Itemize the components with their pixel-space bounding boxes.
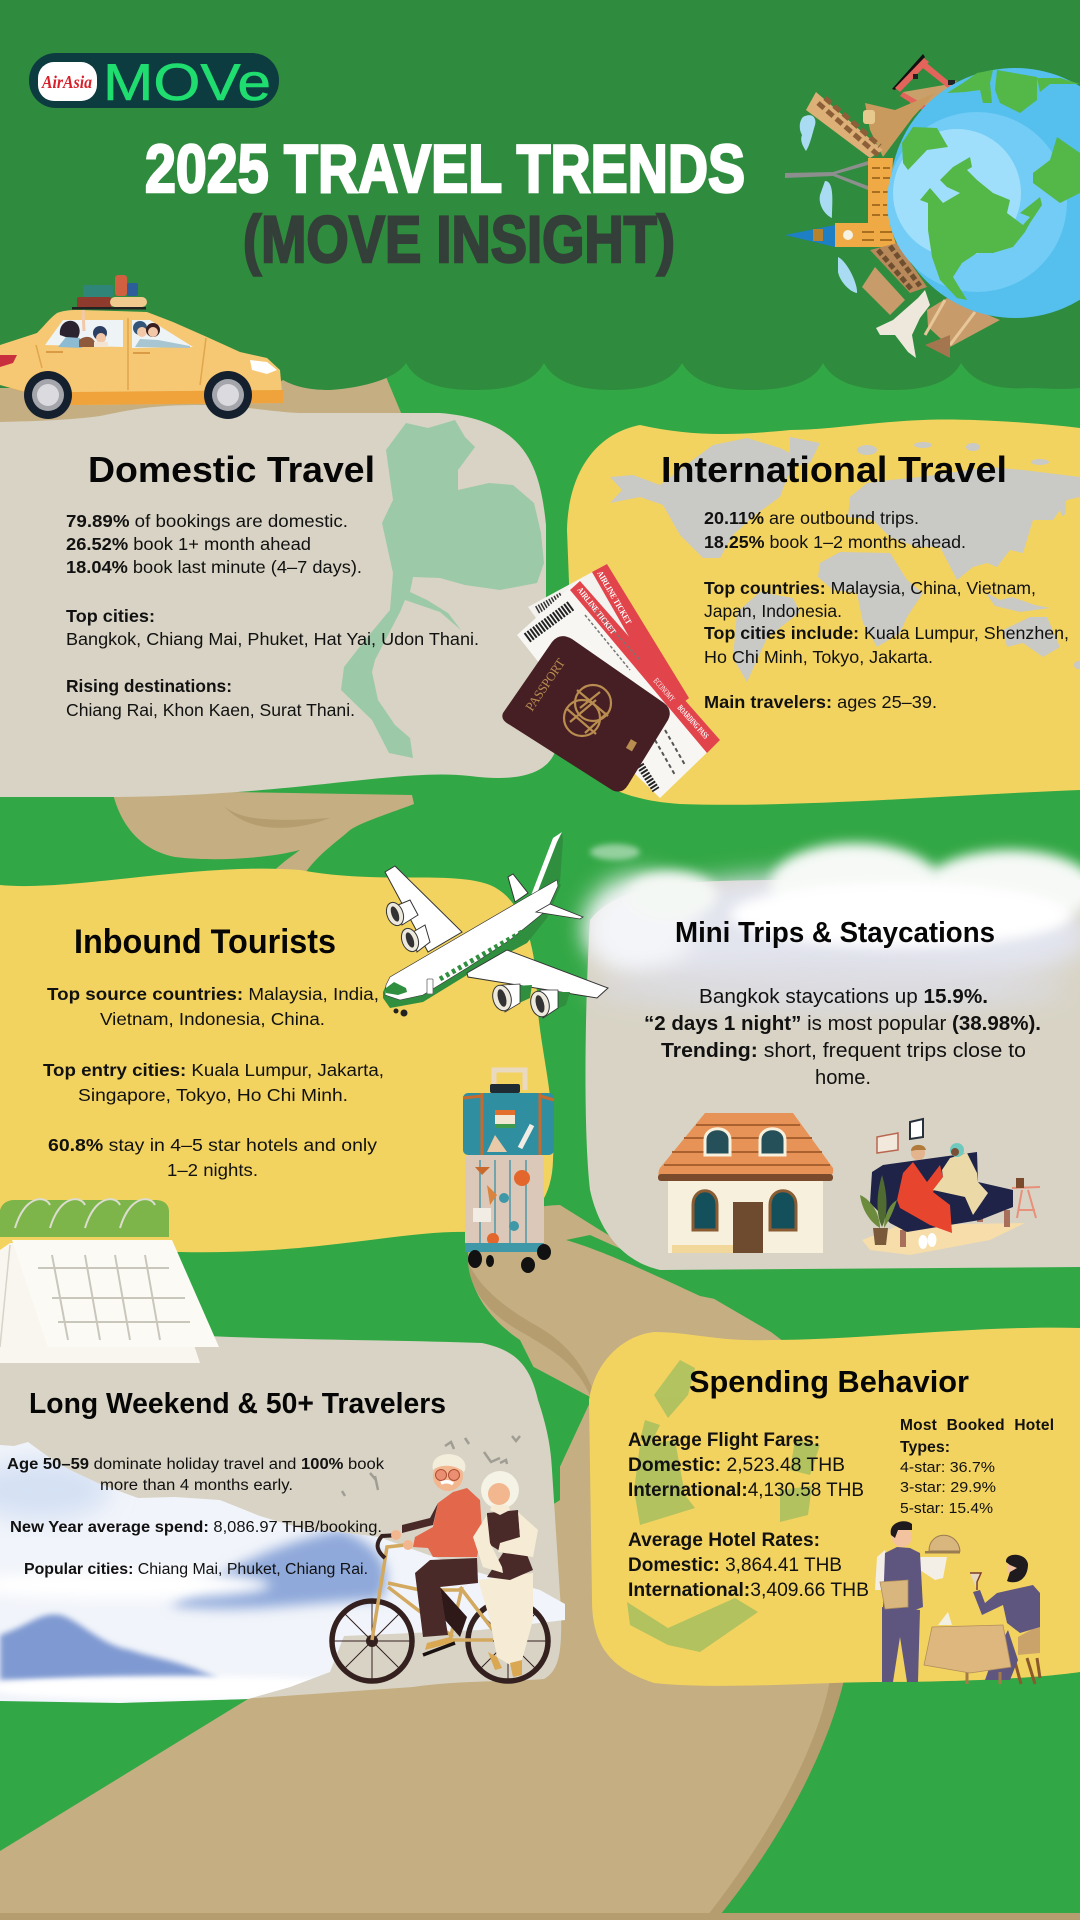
text: long weekend: New Year average spend: 8,086.97 THB/booking. <box>10 1519 382 1536</box>
text: spending behavior: International:4,130.58 THB <box>628 1480 864 1501</box>
text: international travel: 20.11% are outbound trips. <box>704 508 919 528</box>
cockpit band <box>386 982 407 995</box>
woman head <box>950 1143 964 1157</box>
text: long weekend <box>7 1388 446 1578</box>
mist and mountains <box>0 1460 110 1520</box>
woman shoes <box>488 1652 522 1677</box>
main road <box>0 1205 1080 1920</box>
text: mini trips: Bangkok staycations up 15.9%. <box>699 986 988 1008</box>
front page <box>12 1240 219 1347</box>
hub <box>366 1635 378 1647</box>
text: spending behavior <box>628 1364 1054 1601</box>
text: spending behavior: 5-star: 15.4% <box>900 1500 993 1517</box>
text: inbound tourists: Top source countries: Malaysia, India, <box>47 984 379 1004</box>
person in red blanket <box>897 1162 952 1233</box>
illustration: waiter <box>875 1521 960 1682</box>
back pages <box>0 1243 200 1363</box>
roof tile lines <box>664 1125 830 1165</box>
wine glass <box>970 1573 981 1590</box>
text: mini trips: Trending: short, frequent trips close to <box>661 1040 1026 1062</box>
text: international travel: Main travelers: ages 25–39. <box>704 692 937 712</box>
landing gear <box>394 1008 408 1016</box>
text: inbound tourists: Top entry cities: Kuala Lumpur, Jakarta, <box>43 1060 384 1080</box>
landmark: torii gate <box>892 54 958 112</box>
diner head <box>1006 1555 1028 1582</box>
green header <box>0 1200 169 1237</box>
text: inbound tourists: Inbound Tourists <box>74 923 336 961</box>
icon: calendar <box>0 1199 219 1363</box>
map: Thailand <box>341 420 544 758</box>
passport <box>502 636 670 792</box>
winding road segment <box>112 790 414 885</box>
passport emblem <box>564 685 611 736</box>
text: domestic travel: Rising destinations: <box>66 676 232 696</box>
table <box>924 1625 1011 1673</box>
man torso <box>413 1488 482 1557</box>
icon: money bills <box>627 1360 820 1652</box>
illustration: birds <box>342 1436 520 1496</box>
woman head <box>481 1471 519 1515</box>
waiter head <box>891 1521 912 1547</box>
landmark: white statue <box>876 290 930 358</box>
text: domestic travel: 79.89% of bookings are domestic. <box>66 511 348 531</box>
watercolor landscape <box>0 1440 570 1705</box>
back ticket <box>528 564 689 760</box>
text: spending behavior: 4-star: 36.7% <box>900 1459 995 1476</box>
text: domestic travel: 18.04% book last minute (4–7 days). <box>66 557 362 577</box>
door <box>427 979 433 994</box>
text: spending behavior: International:3,409.66 THB <box>628 1580 869 1601</box>
door <box>733 1202 763 1253</box>
ground <box>672 1245 733 1253</box>
fuselage white top <box>385 880 558 1000</box>
windows <box>45 320 193 348</box>
text: spending behavior: Types: <box>900 1439 950 1456</box>
dark green sky with scalloped edge <box>0 0 1080 390</box>
text: mini trips <box>644 917 1041 1089</box>
engines <box>383 900 570 1019</box>
icon: globe with landmarks <box>785 54 1080 358</box>
text: international travel: Japan, Indonesia. <box>704 601 842 621</box>
text: international travel <box>661 449 1069 712</box>
landmark: clock spire <box>785 225 853 247</box>
text: domestic travel: Domestic Travel <box>88 449 375 490</box>
road behind car <box>0 372 404 440</box>
logo: AirAsia <box>41 72 92 92</box>
wing upper <box>385 866 462 952</box>
suitcase ribs and stickers <box>465 1160 544 1252</box>
man trousers <box>415 1558 478 1637</box>
back leg <box>440 1587 467 1637</box>
diner legs <box>985 1630 1018 1680</box>
wall pictures <box>877 1119 923 1153</box>
text: spending behavior: Average Hotel Rates: <box>628 1530 820 1551</box>
fuselage green underside <box>383 880 561 1008</box>
front ticket: AIRLINE TICKET <box>575 585 619 636</box>
tail fin <box>530 832 563 898</box>
text: international travel: Top cities include: Kuala Lumpur, Shenzhen, <box>704 623 1069 643</box>
text: mini trips: Mini Trips & Staycations <box>675 917 995 949</box>
front ticket <box>517 580 720 798</box>
wheels <box>24 371 252 419</box>
title: (MOVE INSIGHT) <box>243 202 675 276</box>
illustration: senior couple on bicycle <box>332 1454 548 1681</box>
text: international travel: International Travel <box>661 449 1007 490</box>
illustration: diner at table <box>924 1555 1040 1684</box>
rings <box>15 1199 155 1228</box>
beige suitcase <box>465 1155 544 1251</box>
logo <box>29 53 279 112</box>
text: inbound tourists <box>43 923 384 1180</box>
title: 2025 TRAVEL TRENDS <box>145 131 745 207</box>
woman vest <box>487 1510 533 1580</box>
wing lower <box>467 950 608 998</box>
vest <box>883 1547 923 1612</box>
icon: car with luggage <box>0 275 283 419</box>
bicycle wheels <box>332 1601 548 1681</box>
car body <box>0 310 283 405</box>
text: inbound tourists: Singapore, Tokyo, Ho Chi Minh. <box>78 1085 348 1105</box>
white sleeves <box>875 1550 947 1590</box>
rear sleeve <box>402 1503 438 1533</box>
panel: domestic background <box>0 405 558 797</box>
chair legs <box>1014 1658 1040 1684</box>
title <box>145 131 745 276</box>
text: spending behavior: Average Flight Fares: <box>628 1430 820 1451</box>
text: international travel: Top countries: Malaysia, China, Vietnam, <box>704 578 1036 598</box>
passport word: PASSPORT <box>522 656 568 714</box>
rug <box>862 1223 1025 1255</box>
bicycle frame <box>372 1545 493 1640</box>
text: long weekend: Long Weekend & 50+ Travelers <box>29 1388 446 1420</box>
continents <box>902 70 1080 300</box>
cup <box>1016 1178 1024 1188</box>
sofa legs <box>903 1210 1007 1247</box>
text: spending behavior: Domestic: 2,523.48 THB <box>628 1455 845 1476</box>
front ticket: BOARDING PASS <box>676 703 711 741</box>
text: domestic travel: Bangkok, Chiang Mai, Phuket, Hat Yai, Udon Thani. <box>66 629 479 649</box>
icon: suitcases <box>463 1070 554 1273</box>
text: inbound tourists: 60.8% stay in 4–5 star hotels and only <box>48 1135 377 1155</box>
panel: inbound background <box>0 869 553 1252</box>
plant <box>860 1175 897 1245</box>
text: domestic travel <box>66 449 479 720</box>
cloud over mini trips panel <box>585 843 1080 1015</box>
handlebar <box>378 1535 400 1558</box>
sofa <box>870 1152 1013 1232</box>
panel: spending background <box>589 1328 1080 1686</box>
front ticket: ECONOMY <box>651 676 677 703</box>
page edge <box>0 1245 10 1347</box>
handle <box>494 1070 525 1090</box>
panel: mini trips background <box>585 880 1080 1270</box>
text: long weekend: Age 50–59 dominate holiday travel and 100% book <box>7 1456 384 1473</box>
text: domestic travel: 26.52% book 1+ month ahead <box>66 534 311 554</box>
hands <box>391 1530 413 1550</box>
napkin <box>938 1612 952 1625</box>
text: inbound tourists: 1–2 nights. <box>167 1160 258 1180</box>
text: international travel: Ho Chi Minh, Tokyo, Jakarta. <box>704 647 933 667</box>
stabiliser <box>536 904 583 919</box>
apron <box>880 1580 908 1609</box>
map: world <box>610 437 1080 682</box>
passport chip <box>626 739 637 751</box>
small fin <box>508 874 528 902</box>
passengers <box>58 310 190 348</box>
text: domestic travel: Chiang Rai, Khon Kaen, Surat Thani. <box>66 700 355 720</box>
text: domestic travel: Top cities: <box>66 606 155 626</box>
back ticket: AIRLINE TICKET <box>595 569 634 626</box>
globe sphere <box>890 68 1080 318</box>
text: spending behavior: Most Booked Hotel <box>900 1417 1054 1434</box>
grid <box>38 1255 190 1340</box>
panel: long weekend background <box>0 1336 561 1701</box>
straps and stickers <box>463 1084 554 1155</box>
text: spending behavior: Spending Behavior <box>689 1364 969 1399</box>
diner body <box>973 1585 1040 1633</box>
icon: tickets and passport <box>502 564 720 798</box>
roof luggage <box>72 275 147 310</box>
woman trousers <box>478 1573 533 1665</box>
landmark: orange tower <box>835 158 897 247</box>
icon: airplane <box>383 832 608 1019</box>
window dots <box>440 932 522 979</box>
waiter trousers <box>882 1607 920 1682</box>
table legs <box>967 1672 1000 1684</box>
text: mini trips: home. <box>815 1067 871 1089</box>
serving cloche <box>925 1535 960 1554</box>
lower stripe <box>0 385 283 405</box>
roof eave <box>658 1174 833 1181</box>
man head <box>433 1454 465 1491</box>
text: spending behavior: 3-star: 29.9% <box>900 1479 996 1496</box>
landmark: sphinx hill <box>863 93 935 157</box>
text: long weekend: more than 4 months early. <box>100 1477 293 1494</box>
side table <box>1012 1187 1040 1218</box>
clouds around globe <box>800 115 857 293</box>
landmark: leaning block <box>806 92 883 158</box>
tail and head lights <box>0 318 277 390</box>
socks <box>918 1233 936 1249</box>
text: mini trips: “2 days 1 night” is most popular (38.98%). <box>644 1013 1041 1035</box>
teal suitcase <box>463 1093 554 1155</box>
text: inbound tourists: Vietnam, Indonesia, China. <box>100 1009 325 1029</box>
panel: international background <box>567 419 1080 805</box>
wheels <box>468 1244 551 1273</box>
logo: MOVe <box>103 54 271 112</box>
person in beige blanket <box>933 1153 988 1215</box>
landmark: lower buildings <box>862 243 1000 358</box>
chair <box>1018 1625 1040 1655</box>
shoe <box>423 1637 455 1655</box>
text: long weekend: Popular cities: Chiang Mai, Phuket, Chiang Rai. <box>24 1561 368 1578</box>
landmark: eiffel tower <box>785 161 868 190</box>
text: international travel: 18.25% book 1–2 months ahead. <box>704 532 966 552</box>
roof <box>658 1113 833 1179</box>
illustration: house <box>658 1113 833 1253</box>
woman arms <box>473 1512 538 1573</box>
text: spending behavior: Domestic: 3,864.41 THB <box>628 1555 842 1576</box>
grass patch between road and panels <box>530 1365 592 1486</box>
illustration: couple on sofa <box>860 1119 1040 1255</box>
dormer windows <box>705 1129 785 1155</box>
man head <box>911 1145 926 1160</box>
house walls <box>668 1178 823 1253</box>
windows <box>693 1191 796 1230</box>
grass patch right of road <box>566 1235 1080 1330</box>
